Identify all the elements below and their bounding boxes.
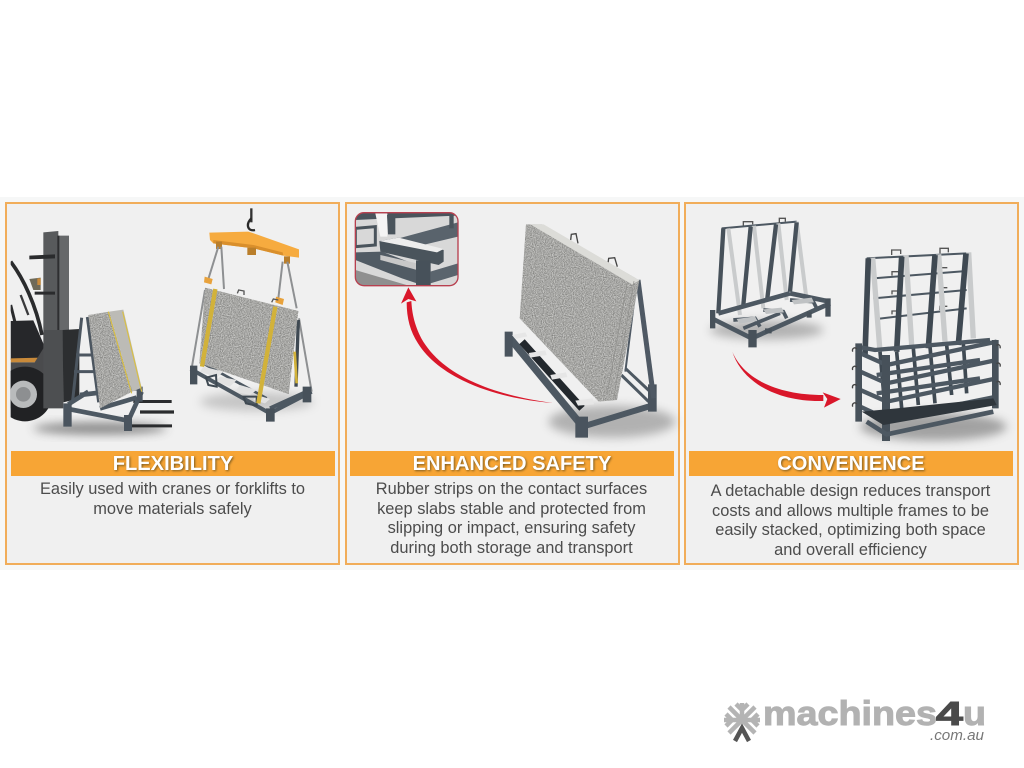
logo: machines4u.com.au (724, 695, 986, 744)
illustration: forklift and crane lifting slab racks (10, 208, 314, 441)
single detachable A-frame (710, 218, 831, 347)
description: flexibility: move materials safely (93, 500, 252, 518)
description: enhanced safety (376, 480, 647, 557)
description: enhanced safety: slipping or impact, ensuring safety (388, 519, 635, 537)
illustration: single frame and stacked frames (708, 218, 1010, 446)
crane with spreader beam lifting a loaded rack (190, 208, 313, 422)
description: convenience: costs and allows multiple frames to be (712, 502, 989, 520)
heading: convenience: CONVENIENCE (777, 453, 925, 475)
illustration: loaded rack with rubber strip detail (354, 212, 679, 443)
icon: snowflake arrows (724, 703, 760, 741)
domain suffix: .com.au (930, 727, 985, 744)
wordmark: machines (763, 695, 937, 733)
heading: enhanced safety: ENHANCED SAFETY (413, 453, 611, 475)
description: flexibility: Easily used with cranes or forklifts to (40, 480, 305, 498)
forklift carrying a rack (0, 231, 174, 434)
description: enhanced safety: during both storage and transport (390, 539, 633, 557)
heading: convenience (689, 451, 1013, 476)
wordmark digit: 4 (936, 695, 964, 732)
inset: rubber strip close-up (355, 213, 458, 286)
stacked frames (852, 248, 1007, 441)
description: convenience: easily stacked, optimizing both space (715, 521, 986, 539)
description: enhanced safety: keep slabs stable and protected from (377, 500, 646, 518)
heading: flexibility: FLEXIBILITY (113, 453, 233, 475)
description: convenience: and overall efficiency (774, 541, 927, 559)
arrow: red curved arrow to stacked frames (732, 352, 841, 408)
heading: flexibility (11, 451, 335, 476)
wordmark letter: u (963, 695, 986, 733)
description: convenience (710, 482, 990, 559)
description: flexibility (40, 480, 305, 518)
arrow: red curved arrow from rack to inset (401, 287, 553, 403)
panel: enhanced safety (345, 202, 680, 565)
panel: flexibility (5, 202, 340, 565)
heading: enhanced safety (350, 451, 674, 476)
panel: convenience (684, 202, 1019, 565)
description: enhanced safety: Rubber strips on the contact surfaces (376, 480, 647, 498)
illustration: slab stack on A-frame rack (505, 224, 675, 438)
description: convenience: A detachable design reduces transport (711, 482, 990, 500)
